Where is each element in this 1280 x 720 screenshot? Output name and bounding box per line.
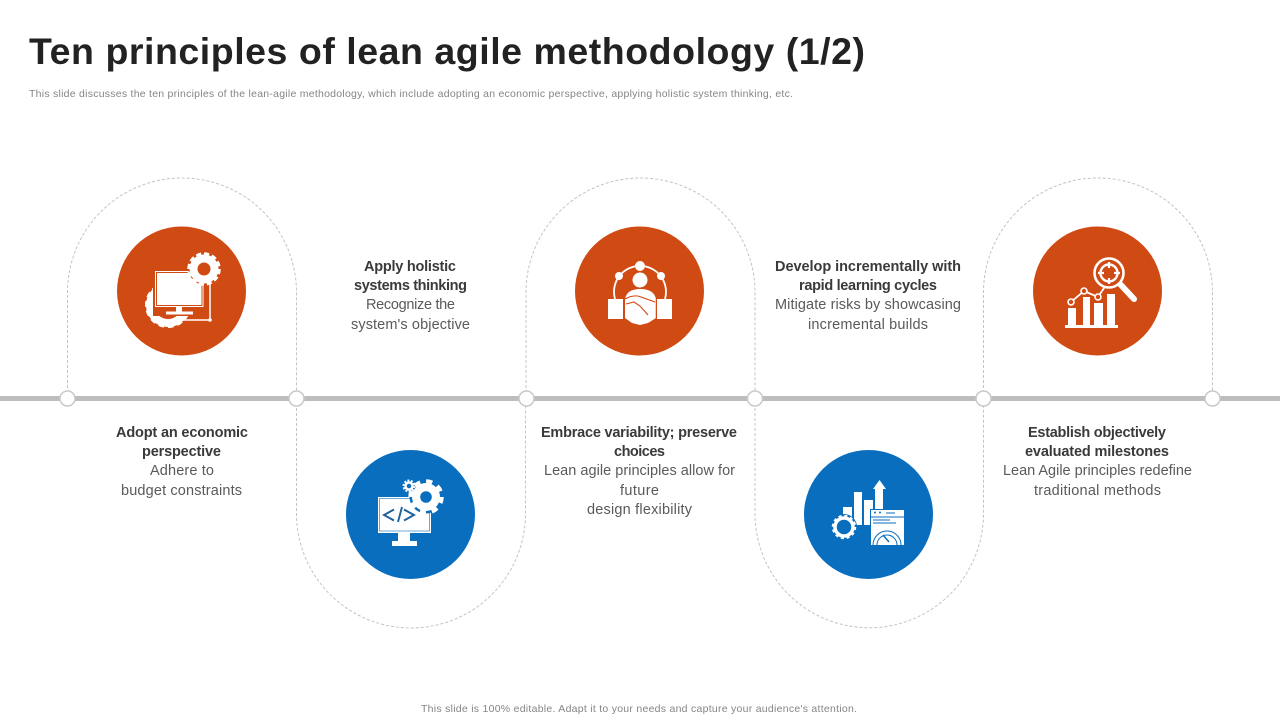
text: develop incrementally: incremental builds: [808, 317, 928, 333]
text: develop incrementally: rapid learning cycles: [799, 278, 937, 294]
text: establish milestones: Lean Agile principles redefine: [1003, 463, 1192, 479]
text: embrace variability: [541, 425, 737, 518]
title: Ten principles of lean agile methodology (1/2): [29, 30, 865, 72]
text: apply holistic systems thinking: [351, 259, 470, 333]
text: apply holistic systems thinking: Apply holistic: [364, 259, 456, 275]
text: develop incrementally: Mitigate risks by showcasing: [775, 297, 961, 313]
text: establish milestones: Establish objectively: [1028, 425, 1166, 441]
text: embrace variability: design flexibility: [587, 502, 693, 518]
text: embrace variability: choices: [614, 444, 665, 460]
text: establish milestones: [1003, 425, 1192, 499]
icon: chart with magnifier: [1033, 226, 1162, 356]
text: establish milestones: traditional methods: [1034, 483, 1161, 499]
text: develop incrementally: Develop incrementally with: [775, 259, 961, 275]
text: embrace variability: future: [620, 483, 659, 499]
text: apply holistic systems thinking: Recognize the: [366, 297, 455, 313]
text: adopt an economic perspective: Adopt an economic: [116, 425, 248, 441]
icon: code monitor with gears: [346, 450, 475, 579]
text: develop incrementally: [775, 259, 961, 333]
text: adopt an economic perspective: [116, 425, 248, 499]
text: embrace variability: Embrace variability; preserve: [541, 425, 737, 441]
timeline track: [0, 396, 1280, 401]
icon: monitor with gears: [117, 226, 246, 356]
text: embrace variability: Lean agile principles allow for: [544, 463, 735, 479]
text: apply holistic systems thinking: systems thinking: [354, 278, 467, 294]
footer note: This slide is 100% editable. Adapt it to your needs and capture your audience's attention.: [421, 703, 857, 715]
text: establish milestones: evaluated milestones: [1025, 444, 1169, 460]
text: apply holistic systems thinking: system's objective: [351, 317, 470, 333]
text: adopt an economic perspective: budget constraints: [121, 483, 242, 499]
dashed arches: [68, 178, 1212, 628]
text: adopt an economic perspective: Adhere to: [150, 463, 214, 479]
subtitle: This slide discusses the ten principles of the lean-agile methodology, which include adopting an economic perspective, applying holistic system thinking, etc.: [29, 88, 793, 100]
icon: growth bars with gauge: [804, 450, 933, 579]
timeline nodes: [60, 391, 1220, 406]
text: adopt an economic perspective: perspective: [142, 444, 221, 460]
icon: handshake network: [575, 226, 704, 356]
